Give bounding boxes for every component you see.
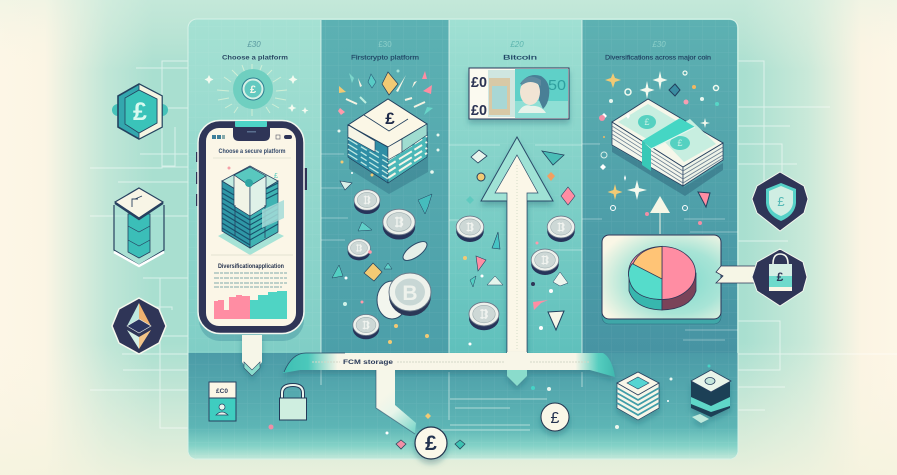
icon: ethereum hexagon [112,298,166,354]
phone: server stack: £ [274,173,278,180]
icon: banknote [469,68,569,119]
phone: text section: Diversificationapplication [218,263,284,270]
id card: £C0 [216,388,228,395]
icon: teal hexagon pound: £ [133,98,147,126]
sparkle dots: bottom right [615,364,710,429]
icon: cube with pound: £ [385,109,395,128]
icon: banknote: 50 [548,77,566,94]
icon: pound coin large: £ [425,432,437,455]
icon: pound coin small [541,403,569,431]
phone: server stack [218,166,284,255]
heading: column 1: Choose a platform [222,54,288,62]
icon: banknote stack: £ [677,138,683,148]
outer connector lines [90,61,897,428]
arrow: phone down tab [242,335,262,376]
icon: padlock hexagon [752,249,807,306]
phone: bar chart [214,291,287,319]
padlock [280,385,306,420]
heading: column 4 [605,40,711,62]
heading: column 4: £30 [651,40,666,49]
heading: column 4: Diversifications across major coin [605,54,711,62]
coins [348,190,575,339]
icon: phone [196,120,307,341]
heading: column 3: £20 [509,40,524,49]
arrow: big upward [481,137,553,355]
icon: pound sun badge [204,64,308,116]
heading: column 3: Bitcoin [503,54,538,62]
icon: striped server [617,372,659,420]
phone status icons [212,135,292,139]
panel: column 3 [449,20,582,353]
pie chart [628,246,696,310]
coins: B [402,282,418,305]
card: pie chart [602,235,760,324]
ribbon: FCM storage [283,352,615,386]
panel: column 4 [582,20,737,353]
diamonds near pound [268,386,551,449]
icon: banknote: £0 [471,102,487,119]
icon: teal hexagon pound [112,84,168,139]
phone: text section [211,255,293,287]
icon: isometric pillar [114,188,164,266]
icon: pound coin small: £ [551,410,560,427]
burst shards [338,70,440,176]
heading: column 2 [351,40,420,62]
panel: bottom band [188,353,738,458]
heading: column 1 [222,40,288,62]
icon: padlock hexagon: £ [777,270,784,284]
icon: shield hexagon [752,172,808,231]
panel: main board [188,19,738,459]
arrow: elbow down to pound [376,370,416,434]
decorative shards [332,150,575,346]
phone notch [233,121,270,141]
icon: cube with pound [338,70,440,194]
heading: column 1: £30 [246,40,261,49]
heading: column 2: £30 [378,40,392,49]
id card [209,382,236,421]
icon: pound coin large [415,427,447,459]
heading: column 3 [503,40,538,62]
ribbon: FCM storage: FCM storage [343,360,394,366]
banknote portrait [518,75,549,113]
icon: server with disc [691,370,731,423]
icon: shield hexagon: £ [777,194,785,209]
icon: banknote: £0 [471,74,487,91]
panel: column 2 [321,20,449,353]
sparkles: column 4 [599,71,719,234]
icon: banknote stack: £ [644,117,650,127]
heading: column 2: Firstcrypto platform [351,54,420,62]
phone heading: Choose a secure platform [218,148,286,155]
icon: banknote stack [612,99,723,196]
icon: pound sun badge: £ [250,84,256,96]
